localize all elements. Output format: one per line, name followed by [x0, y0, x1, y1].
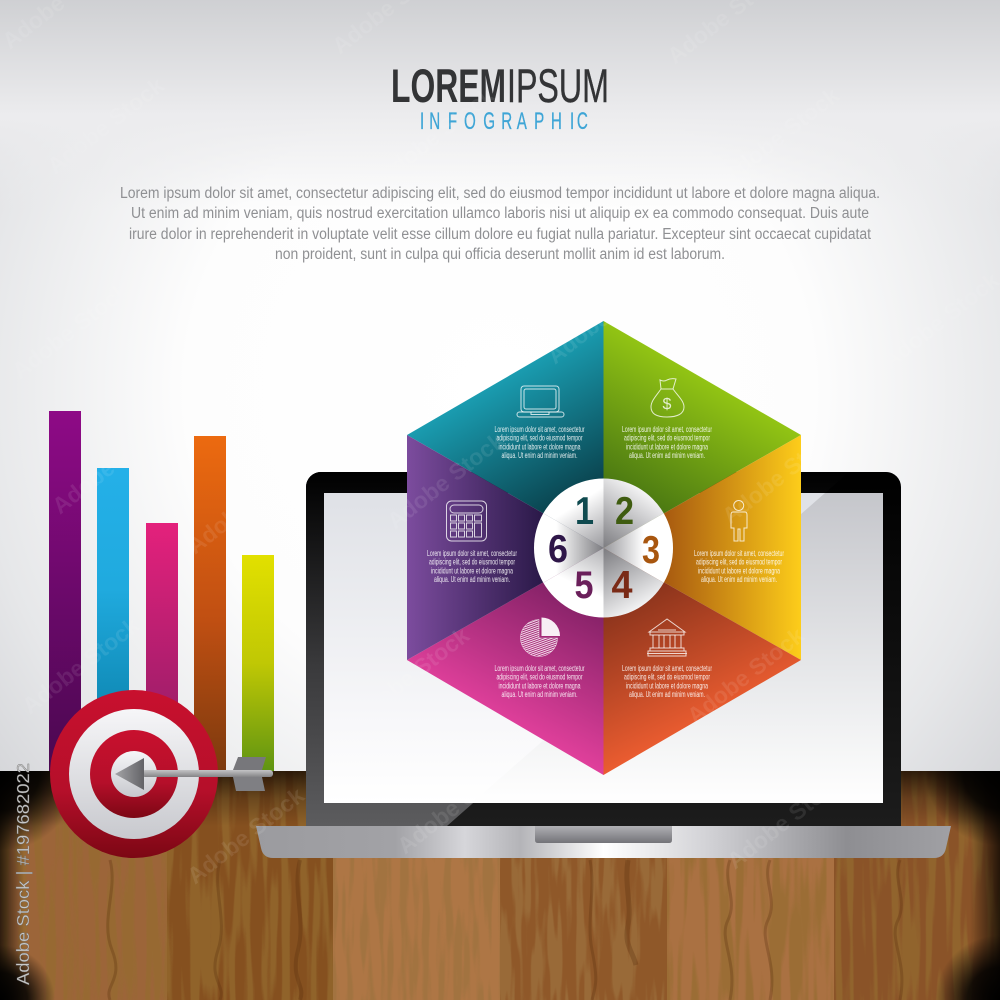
title: LOREM [391, 59, 506, 112]
text block 6: aliqua. Ut enim ad minim veniam. [434, 575, 510, 584]
stock id label: Adobe Stock | #197682022 [13, 763, 33, 985]
text block 5: adipiscing elit, sed do eiusmod tempor [496, 673, 583, 682]
bar chart [49, 411, 274, 771]
arrow [115, 757, 273, 791]
hexagon diagram [407, 321, 801, 775]
wheel numbers: 5 [574, 564, 594, 607]
watermark pattern: Adobe Stock [42, 72, 169, 179]
icon: laptop [517, 386, 564, 417]
watermark pattern: Adobe Stock [7, 277, 134, 384]
text block 5: incididunt ut labore et dolore magna [498, 681, 581, 690]
icon: calculator [446, 501, 486, 541]
watermark pattern: Adobe Stock [347, 622, 474, 729]
text block 6 [427, 549, 517, 584]
laptop notch [535, 826, 672, 843]
title: IPSUM [507, 59, 609, 112]
watermark pattern: Adobe Stock [392, 752, 519, 859]
segment 6: purple [407, 435, 604, 660]
watermark pattern: Adobe Stock [682, 622, 809, 729]
watermark pattern: Adobe Stock [717, 422, 844, 529]
wooden floor [0, 771, 1000, 1000]
segment 5: pink [407, 548, 604, 775]
laptop base [256, 826, 951, 858]
text block 3: adipiscing elit, sed do eiusmod tempor [696, 558, 782, 567]
intro paragraph: irure dolor in reprehenderit in voluptate velit esse cillum dolore eu fugiat nulla pariatur. Excepteur sint occaecat cupidatat [129, 226, 872, 243]
watermark pattern: Adobe Stock [372, 82, 499, 189]
text block 1: aliqua. Ut enim ad minim veniam. [502, 451, 578, 460]
text block 4: adipiscing elit, sed do eiusmod tempor [624, 673, 710, 682]
text block 4: Lorem ipsum dolor sit amet, consectetur [622, 664, 712, 673]
background wall [0, 0, 1000, 771]
text block 2: Lorem ipsum dolor sit amet, consectetur [622, 425, 712, 434]
text block 3: incididunt ut labore et dolore magna [698, 566, 780, 575]
icon: money bag: $ [663, 396, 672, 413]
text block 2: incididunt ut labore et dolore magna [626, 442, 708, 451]
wheel numbers: 1 [575, 490, 594, 533]
text block 3: Lorem ipsum dolor sit amet, consectetur [694, 549, 784, 558]
segment 3: yellow [604, 435, 801, 660]
watermark pattern: Adobe Stock [17, 612, 144, 719]
intro paragraph: Lorem ipsum dolor sit amet, consectetur adipiscing elit, sed do eiusmod tempor incididunt ut labore et dolore magna aliqua. [120, 185, 880, 202]
text block 3: aliqua. Ut enim ad minim veniam. [701, 575, 777, 584]
wheel numbers: 2 [615, 490, 634, 533]
subtitle: INFOGRAPHIC [420, 109, 588, 135]
watermark pattern: Adobe Stock [717, 82, 844, 189]
watermark pattern: Adobe Stock [182, 452, 309, 559]
text block 1: adipiscing elit, sed do eiusmod tempor [496, 434, 583, 443]
segment 1: teal [407, 321, 604, 548]
text block 2 [622, 425, 712, 460]
text block 5 [494, 664, 585, 699]
text block 5: Lorem ipsum dolor sit amet, consectetur [494, 664, 585, 673]
text block 5: aliqua. Ut enim ad minim veniam. [502, 690, 578, 699]
watermark pattern: Adobe Stock [182, 782, 309, 889]
watermark pattern: Adobe Stock [382, 427, 509, 534]
text block 2: adipiscing elit, sed do eiusmod tempor [624, 434, 710, 443]
text block 6: Lorem ipsum dolor sit amet, consectetur [427, 549, 517, 558]
watermark pattern: Adobe Stock [542, 262, 669, 369]
icon: money bag [651, 379, 684, 417]
laptop lid [306, 472, 901, 826]
text block 2: aliqua. Ut enim ad minim veniam. [629, 451, 705, 460]
text block 6: incididunt ut labore et dolore magna [431, 566, 513, 575]
laptop [256, 472, 951, 858]
intro paragraph: Ut enim ad minim veniam, quis nostrud exercitation ullamco laboris nisi ut aliquip ex ea commodo consequat. Duis aute [131, 205, 869, 222]
icon: pie chart [520, 618, 560, 657]
watermark pattern: Adobe Stock [212, 247, 339, 354]
watermark pattern: Adobe Stock [342, 292, 469, 399]
text block 4: aliqua. Ut enim ad minim veniam. [629, 690, 705, 699]
target [50, 690, 218, 858]
text block 3 [694, 549, 784, 584]
intro paragraph: non proident, sunt in culpa qui officia deserunt mollit anim id est laborum. [275, 246, 725, 263]
text block 6: adipiscing elit, sed do eiusmod tempor [429, 558, 515, 567]
wheel numbers: 6 [548, 528, 568, 571]
wheel numbers: 3 [642, 529, 660, 572]
text block 1: Lorem ipsum dolor sit amet, consectetur [494, 425, 585, 434]
wheel numbers: 4 [612, 564, 633, 607]
icon: bank [647, 619, 687, 656]
segment 2: green [604, 321, 801, 548]
watermark pattern: Adobe Stock [722, 767, 849, 874]
text block 4: incididunt ut labore et dolore magna [626, 681, 708, 690]
icon: person [731, 500, 747, 541]
wheel numbers [548, 490, 660, 607]
segment 4: orange [604, 548, 801, 775]
center number wheel [534, 478, 673, 618]
text block 1 [494, 425, 585, 460]
laptop screen [324, 493, 883, 803]
watermark pattern: Adobe Stock [47, 412, 174, 519]
text block 1: incididunt ut labore et dolore magna [498, 442, 581, 451]
intro paragraph [120, 185, 880, 263]
text block 4 [622, 664, 712, 699]
